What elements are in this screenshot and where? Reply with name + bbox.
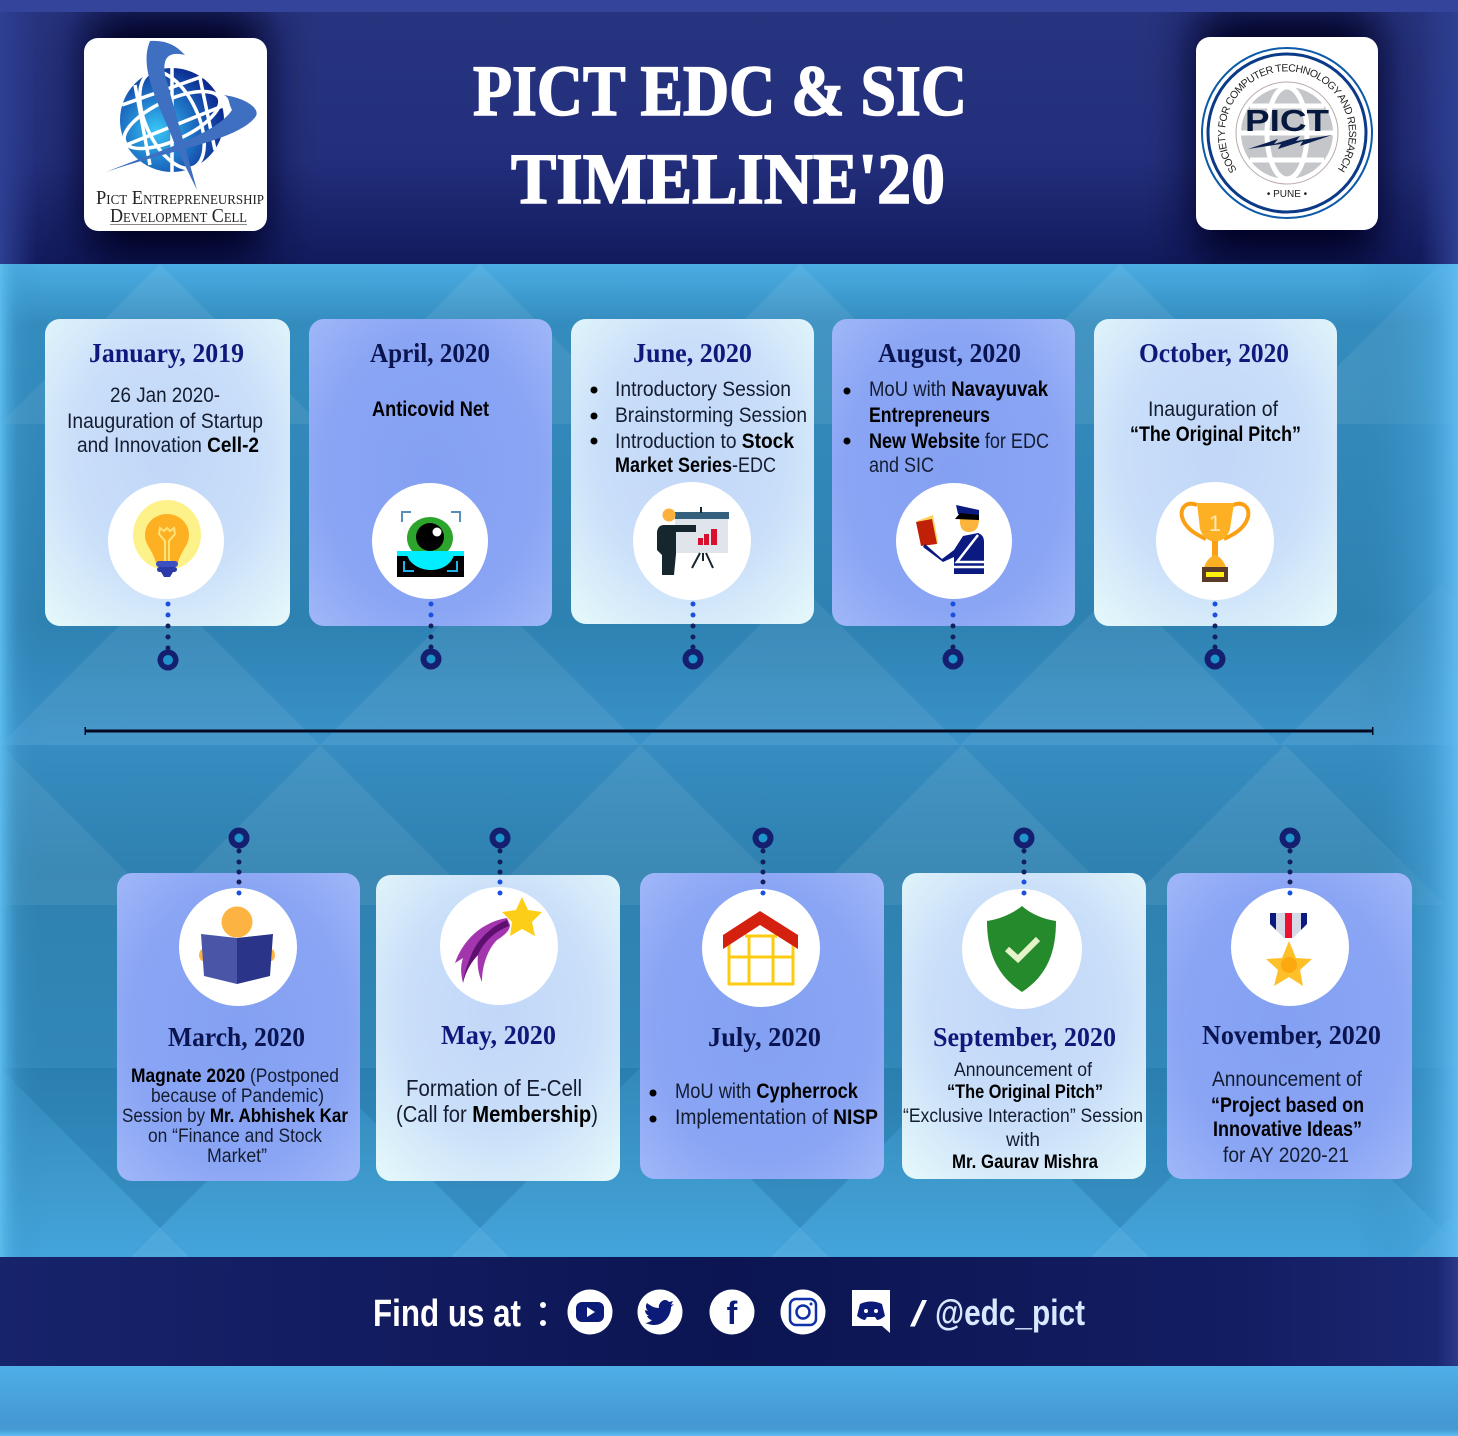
icon: twitter — [638, 1290, 682, 1334]
panel: March 2020 — [117, 873, 360, 1181]
date: August, 2020 — [878, 338, 1021, 368]
footer band — [0, 1257, 1458, 1366]
date: June, 2020 — [633, 338, 752, 368]
icon: discord — [852, 1290, 890, 1333]
footer label: Find us at — [373, 1293, 521, 1335]
logo: PICT Entrepreneurship Development Cell — [84, 38, 267, 231]
description: “The Original Pitch” — [1130, 423, 1301, 446]
icon: facebook: f — [727, 1295, 738, 1331]
icon: facebook — [710, 1290, 754, 1334]
description — [396, 1075, 598, 1127]
date: January, 2019 — [89, 338, 244, 368]
logo: PICT seal — [1196, 37, 1378, 230]
bullet list: Market Series-EDC — [615, 454, 776, 477]
icon: presenter — [633, 482, 751, 600]
header band — [0, 0, 1458, 264]
description: Session by Mr. Abhishek Kar — [122, 1106, 349, 1127]
description: Announcement of — [1212, 1068, 1362, 1091]
icon: trophy — [1156, 482, 1274, 600]
description: with — [1005, 1130, 1040, 1151]
date: May, 2020 — [441, 1020, 556, 1050]
description: on “Finance and Stock — [148, 1126, 322, 1147]
bullet list: MoU with Cypherrock — [675, 1080, 858, 1103]
bullet list: Implementation of NISP — [675, 1106, 878, 1129]
icon: trophy: 1 — [1209, 511, 1221, 536]
description: Inauguration of Startup — [67, 410, 263, 433]
description: Announcement of — [954, 1060, 1093, 1081]
logo: PICT seal: SOCIETY FOR COMPUTER TECHNOLOGY AND RESEARCH — [1218, 64, 1356, 173]
description: (Call for Membership) — [396, 1101, 598, 1127]
bullet list: Introduction to Stock — [615, 430, 794, 453]
logo caption: Development Cell — [110, 205, 247, 227]
connectors: bottom row — [228, 828, 1300, 896]
description — [67, 384, 263, 457]
logo caption: Pict Entrepreneurship — [96, 187, 264, 209]
panel: April 2020 — [309, 319, 552, 626]
description: Inauguration of — [1148, 398, 1278, 421]
panel: January 2019 — [45, 319, 290, 626]
panel: September 2020 — [902, 873, 1146, 1179]
description — [122, 1066, 349, 1167]
date: October, 2020 — [1139, 338, 1289, 368]
title: PICT EDC & SIC — [473, 51, 967, 131]
description: because of Pandemic) — [151, 1086, 324, 1107]
panel: June 2020 — [571, 319, 814, 624]
description: Magnate 2020 (Postponed — [131, 1066, 339, 1087]
connectors: top row — [158, 602, 1226, 670]
bullet list: Introductory Session — [615, 378, 791, 401]
title: TIMELINE'20 — [511, 139, 945, 219]
description: 26 Jan 2020- — [110, 384, 220, 407]
date: November, 2020 — [1202, 1020, 1381, 1050]
description: Mr. Gaurav Mishra — [952, 1152, 1098, 1173]
description: “The Original Pitch” — [947, 1082, 1103, 1103]
icon: officer reading — [896, 483, 1012, 599]
icon: youtube — [568, 1290, 612, 1334]
bullet list — [844, 378, 1049, 477]
date: July, 2020 — [708, 1022, 821, 1052]
description: Market” — [207, 1146, 267, 1167]
colon — [540, 1302, 546, 1326]
bullet list: and SIC — [869, 454, 934, 477]
icon: shield — [962, 889, 1082, 1009]
icon: light bulb — [108, 483, 224, 599]
description — [1130, 398, 1301, 446]
description — [1211, 1068, 1364, 1167]
description: “Exclusive Interaction” Session — [903, 1106, 1143, 1127]
bullet list: Entrepreneurs — [869, 404, 990, 427]
description: and Innovation Cell-2 — [77, 434, 259, 457]
bullet list: New Website for EDC — [869, 430, 1049, 453]
description: Formation of E-Cell — [406, 1075, 582, 1101]
description: for AY 2020-21 — [1223, 1144, 1349, 1167]
bullet list — [650, 1080, 878, 1129]
icon: reader — [179, 888, 297, 1006]
date: April, 2020 — [370, 338, 490, 368]
timeline axis — [84, 727, 1374, 735]
icon: shooting star — [440, 887, 558, 1005]
icon: medal — [1231, 888, 1349, 1006]
icon: instagram — [780, 1290, 826, 1334]
icon: eye scan — [372, 483, 488, 599]
logo: PICT seal: • PUNE • — [1267, 189, 1308, 200]
description: “Project based on — [1211, 1094, 1364, 1117]
description — [903, 1060, 1143, 1173]
date: September, 2020 — [933, 1022, 1116, 1052]
icon: house — [702, 889, 820, 1007]
description: Innovative Ideas” — [1213, 1118, 1362, 1141]
social handle: / — [910, 1293, 927, 1334]
panel: November 2020 — [1167, 873, 1412, 1179]
panel: May 2020 — [376, 875, 620, 1181]
logo caption — [96, 187, 264, 227]
social handle: @edc_pict — [935, 1292, 1085, 1333]
date: March, 2020 — [168, 1022, 305, 1052]
panel: August 2020 — [832, 319, 1075, 626]
bullet list: MoU with Navayuvak — [869, 378, 1048, 401]
bullet list — [590, 378, 807, 477]
description: Anticovid Net — [372, 398, 489, 421]
title — [473, 51, 967, 219]
panel: October 2020 — [1094, 319, 1337, 626]
panel: July 2020 — [640, 873, 884, 1179]
logo: PICT seal: PICT — [1245, 103, 1329, 138]
bullet list: Brainstorming Session — [615, 404, 807, 427]
